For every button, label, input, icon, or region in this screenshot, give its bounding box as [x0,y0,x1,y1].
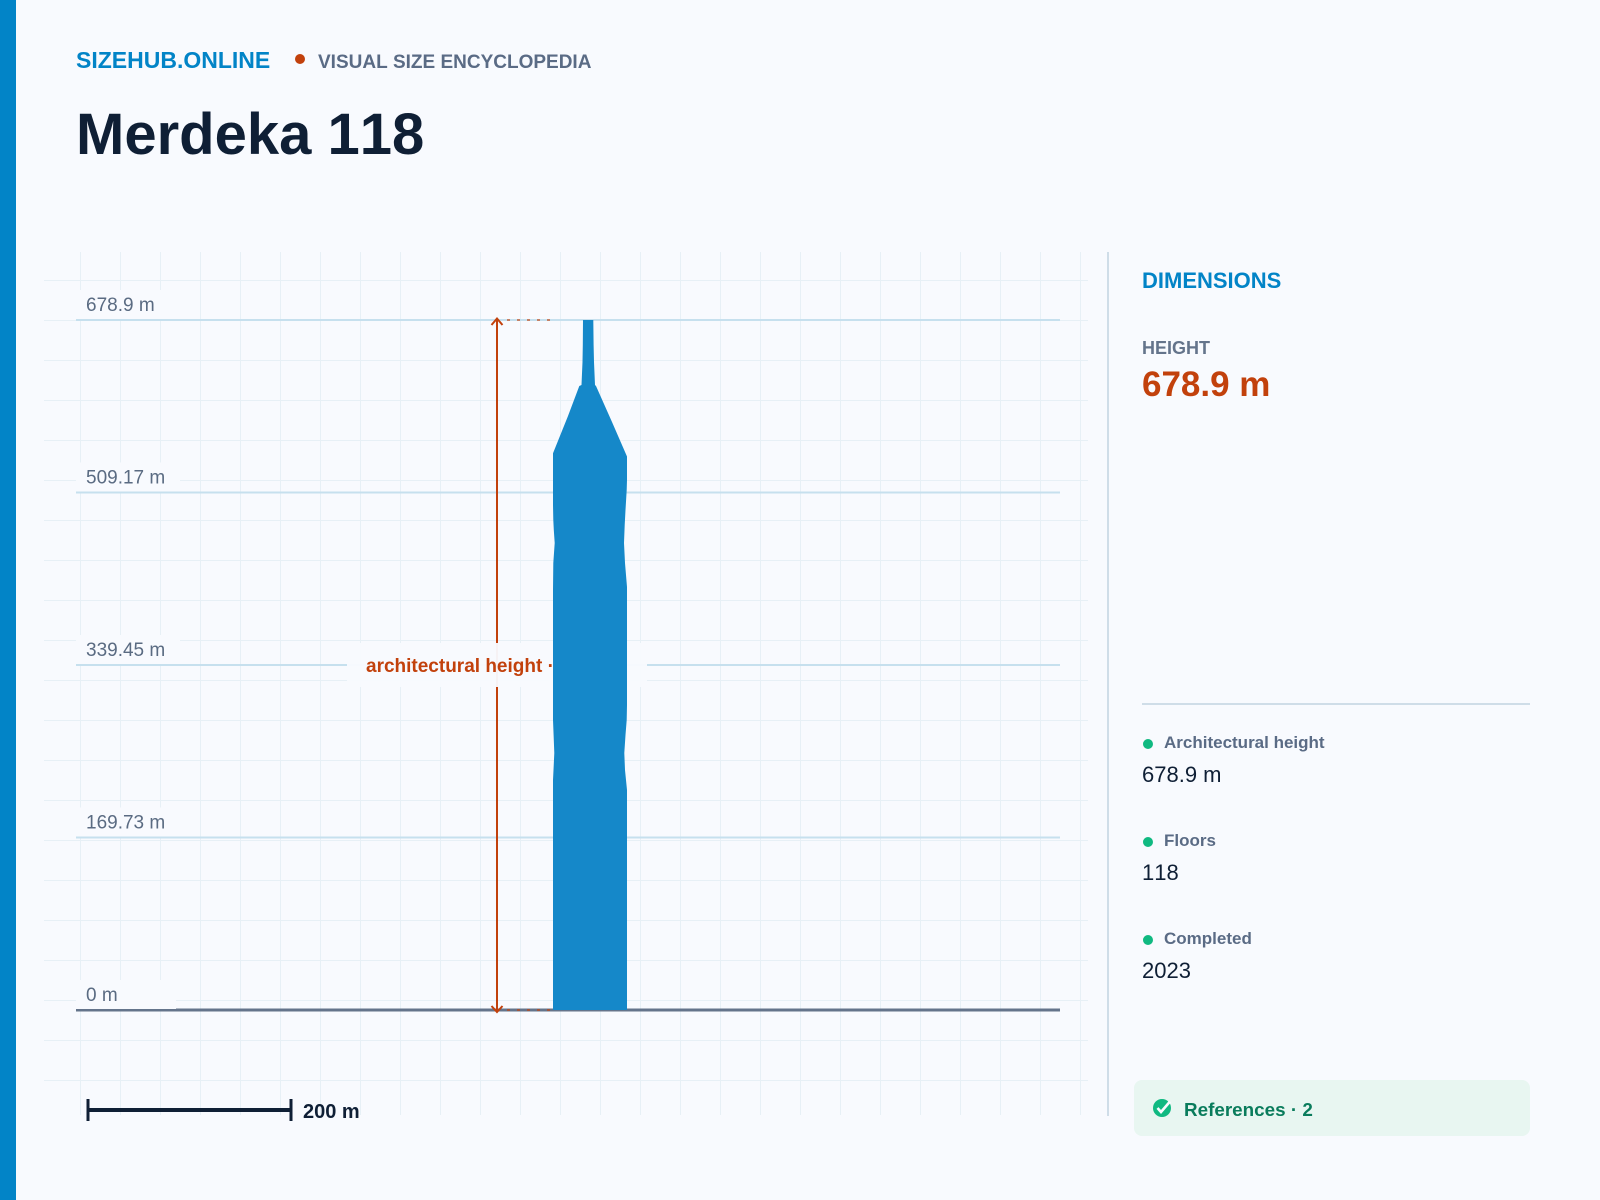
scale label: 200 m [303,1101,360,1123]
fact: architectural height: 678.9 m [1142,762,1222,787]
panel heading: DIMENSIONS [1142,268,1281,293]
references badge [1134,1080,1530,1136]
header [76,47,592,167]
label: 678.9 m [76,290,180,319]
tagline: VISUAL SIZE ENCYCLOPEDIA [318,52,592,73]
tower silhouette [553,320,627,1010]
label: 0 m [76,980,176,1009]
label: 169.73 m: 169.73 m [86,812,165,834]
height reference lines [76,320,1060,838]
sidebar divider [1107,252,1109,1116]
label: 678.9 m: 678.9 m [86,295,155,316]
fact: floors [1142,831,1216,885]
fact: completed: Completed [1164,929,1252,948]
label: 169.73 m [76,808,180,836]
ground line [76,1008,1060,1012]
brand name: SIZEHUB.ONLINE [76,47,270,73]
brand dot [295,54,305,64]
height value: 678.9 m [1142,365,1270,404]
fact: completed [1142,929,1252,983]
fact: completed: 2023 [1142,958,1191,983]
height dimension arrow [492,318,550,1012]
fact: floors: 118 [1142,860,1179,885]
chart: height diagram [44,252,1088,1123]
scale bar [88,1099,360,1123]
label: 509.17 m [76,462,180,492]
fact: architectural height [1142,733,1325,787]
references text: References · 2 [1184,1099,1313,1120]
label: 509.17 m: 509.17 m [86,468,165,488]
fact: floors: Floors [1164,831,1216,850]
dimension label [347,643,647,687]
label: 0 m: 0 m [86,985,118,1006]
label: 339.45 m [76,635,180,664]
icon: check circle [1153,1099,1171,1117]
label: 339.45 m: 339.45 m [86,640,165,661]
fact: architectural height: Architectural height [1164,733,1325,752]
title: Merdeka 118 [76,102,424,167]
height label: HEIGHT [1142,338,1210,358]
dimension label: architectural height · 678.9 m [366,656,629,677]
accent bar [0,0,16,1200]
panel: dimensions [1142,268,1530,983]
